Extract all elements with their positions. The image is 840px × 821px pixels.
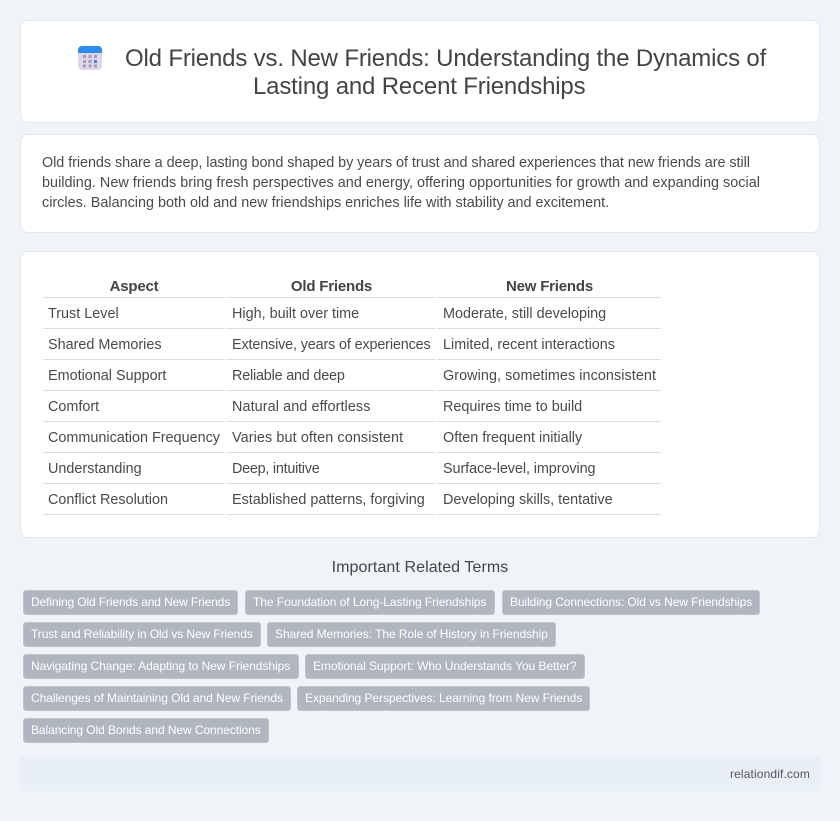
header: New Friends: New Friends (506, 278, 593, 295)
row: Communication Frequency: Often frequent initially (443, 430, 582, 446)
related term tags (23, 590, 760, 743)
row: Comfort (48, 399, 582, 415)
row: Understanding: Understanding (48, 461, 142, 477)
tag (23, 718, 269, 743)
panel: header (20, 20, 820, 123)
row: Comfort: Requires time to build (443, 399, 582, 415)
tag: Trust and Reliability in Old vs New Friends (31, 627, 253, 641)
tag (23, 686, 291, 711)
footer bar (20, 757, 820, 791)
row: Communication Frequency (48, 430, 582, 446)
title: Old Friends vs. New Friends: Understanding the Dynamics of (125, 45, 766, 72)
row: Conflict Resolution (48, 492, 613, 508)
intro text (42, 155, 760, 211)
intro text: circles. Balancing both old and new friendships enriches life with stability and excitement. (42, 195, 609, 211)
row: Understanding: Deep, intuitive (232, 461, 319, 477)
intro text: building. New friends bring fresh perspectives and energy, offering opportunities for growth and expanding social (42, 175, 760, 191)
row: Shared Memories (48, 337, 615, 353)
tag (23, 590, 238, 615)
row: Emotional Support: Growing, sometimes inconsistent (443, 368, 656, 384)
heading: important related terms: Important Related Terms (332, 559, 508, 576)
row: Emotional Support (48, 368, 656, 384)
tag (245, 590, 495, 615)
row: Comfort: Comfort (48, 399, 99, 415)
row: Trust Level: High, built over time (232, 306, 359, 322)
icon: calendar (78, 46, 102, 70)
tag (267, 622, 556, 647)
row: Emotional Support: Emotional Support (48, 368, 166, 384)
panel: introduction (20, 134, 820, 233)
row: Trust Level: Trust Level (48, 306, 119, 322)
tag: Building Connections: Old vs New Friendships (510, 595, 752, 609)
header: Old Friends: Old Friends (291, 278, 372, 295)
row: Communication Frequency: Communication Frequency (48, 430, 220, 446)
row: Emotional Support: Reliable and deep (232, 368, 345, 384)
row: Conflict Resolution: Conflict Resolution (48, 492, 168, 508)
tag (305, 654, 585, 679)
tag (502, 590, 760, 615)
intro text: Old friends share a deep, lasting bond shaped by years of trust and shared experiences that new friends are still (42, 155, 750, 171)
panel: comparison table (20, 251, 820, 538)
tag: Shared Memories: The Role of History in Friendship (275, 627, 548, 641)
comparison table (43, 278, 661, 515)
tag (23, 654, 299, 679)
row: Shared Memories: Limited, recent interactions (443, 337, 615, 353)
tag: Navigating Change: Adapting to New Friendships (31, 659, 290, 673)
title: Lasting and Recent Friendships (253, 73, 585, 100)
row: Comfort: Natural and effortless (232, 399, 371, 415)
row: Understanding (48, 461, 595, 477)
header: Aspect: Aspect (110, 278, 158, 295)
tag (297, 686, 590, 711)
row: Trust Level: Moderate, still developing (443, 306, 606, 322)
row: Trust Level (48, 306, 606, 322)
row: Understanding: Surface-level, improving (443, 461, 595, 477)
tag: Expanding Perspectives: Learning from New Friends (305, 691, 582, 705)
row: Conflict Resolution: Established patterns, forgiving (232, 492, 425, 508)
tag: Balancing Old Bonds and New Connections (31, 723, 261, 737)
row: Communication Frequency: Varies but often consistent (232, 430, 403, 446)
row: Shared Memories: Shared Memories (48, 337, 162, 353)
title (125, 45, 766, 100)
tag: Defining Old Friends and New Friends (31, 595, 230, 609)
tag: Emotional Support: Who Understands You Better? (313, 659, 577, 673)
tag: The Foundation of Long-Lasting Friendships (253, 595, 486, 609)
tag (23, 622, 261, 647)
tag: Challenges of Maintaining Old and New Friends (31, 691, 283, 705)
row: Conflict Resolution: Developing skills, tentative (443, 492, 613, 508)
row: Shared Memories: Extensive, years of experiences (232, 337, 431, 353)
footer text: relationdif.com (730, 767, 810, 781)
